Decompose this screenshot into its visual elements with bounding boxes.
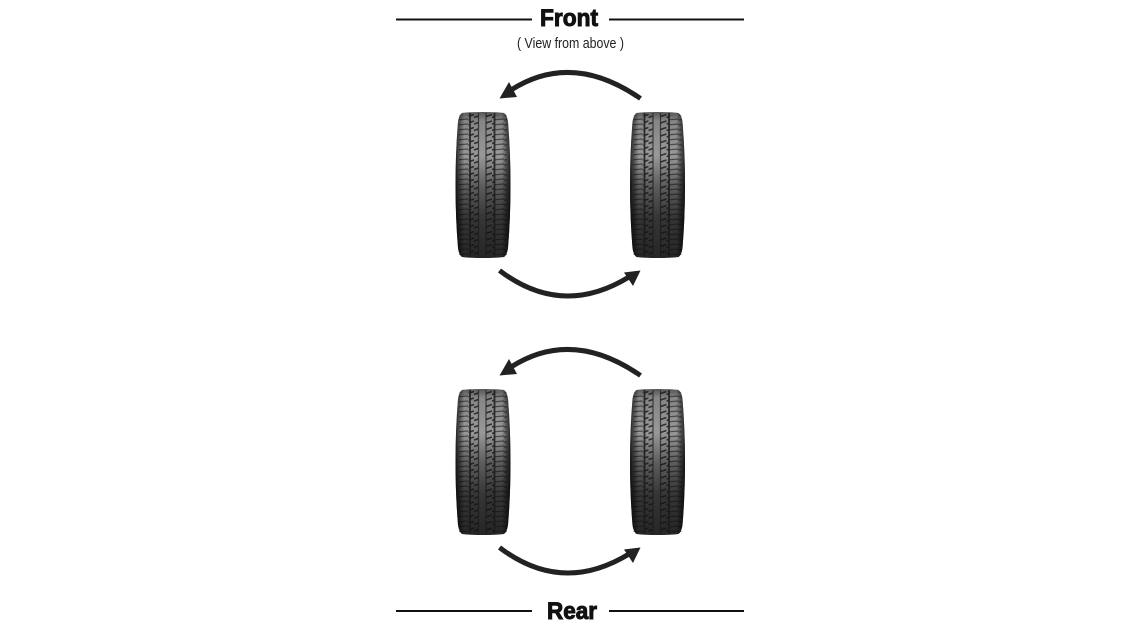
arrow: rear top, right to left	[500, 349, 640, 376]
subtitle: view from above: ( View from above )	[517, 36, 624, 52]
tire: rear left	[456, 389, 510, 535]
tire: front right	[630, 112, 685, 258]
tire: rear right	[630, 389, 685, 535]
heading: Rear: Rear	[547, 598, 597, 625]
arrow: front bottom, left to right	[500, 270, 640, 296]
rear axle group	[456, 349, 685, 573]
tire: front left	[456, 112, 510, 258]
arrow: front top, right to left	[500, 72, 640, 98]
front axle group	[456, 72, 685, 296]
heading: Front: Front	[540, 5, 598, 32]
arrow: rear bottom, left to right	[500, 548, 640, 573]
